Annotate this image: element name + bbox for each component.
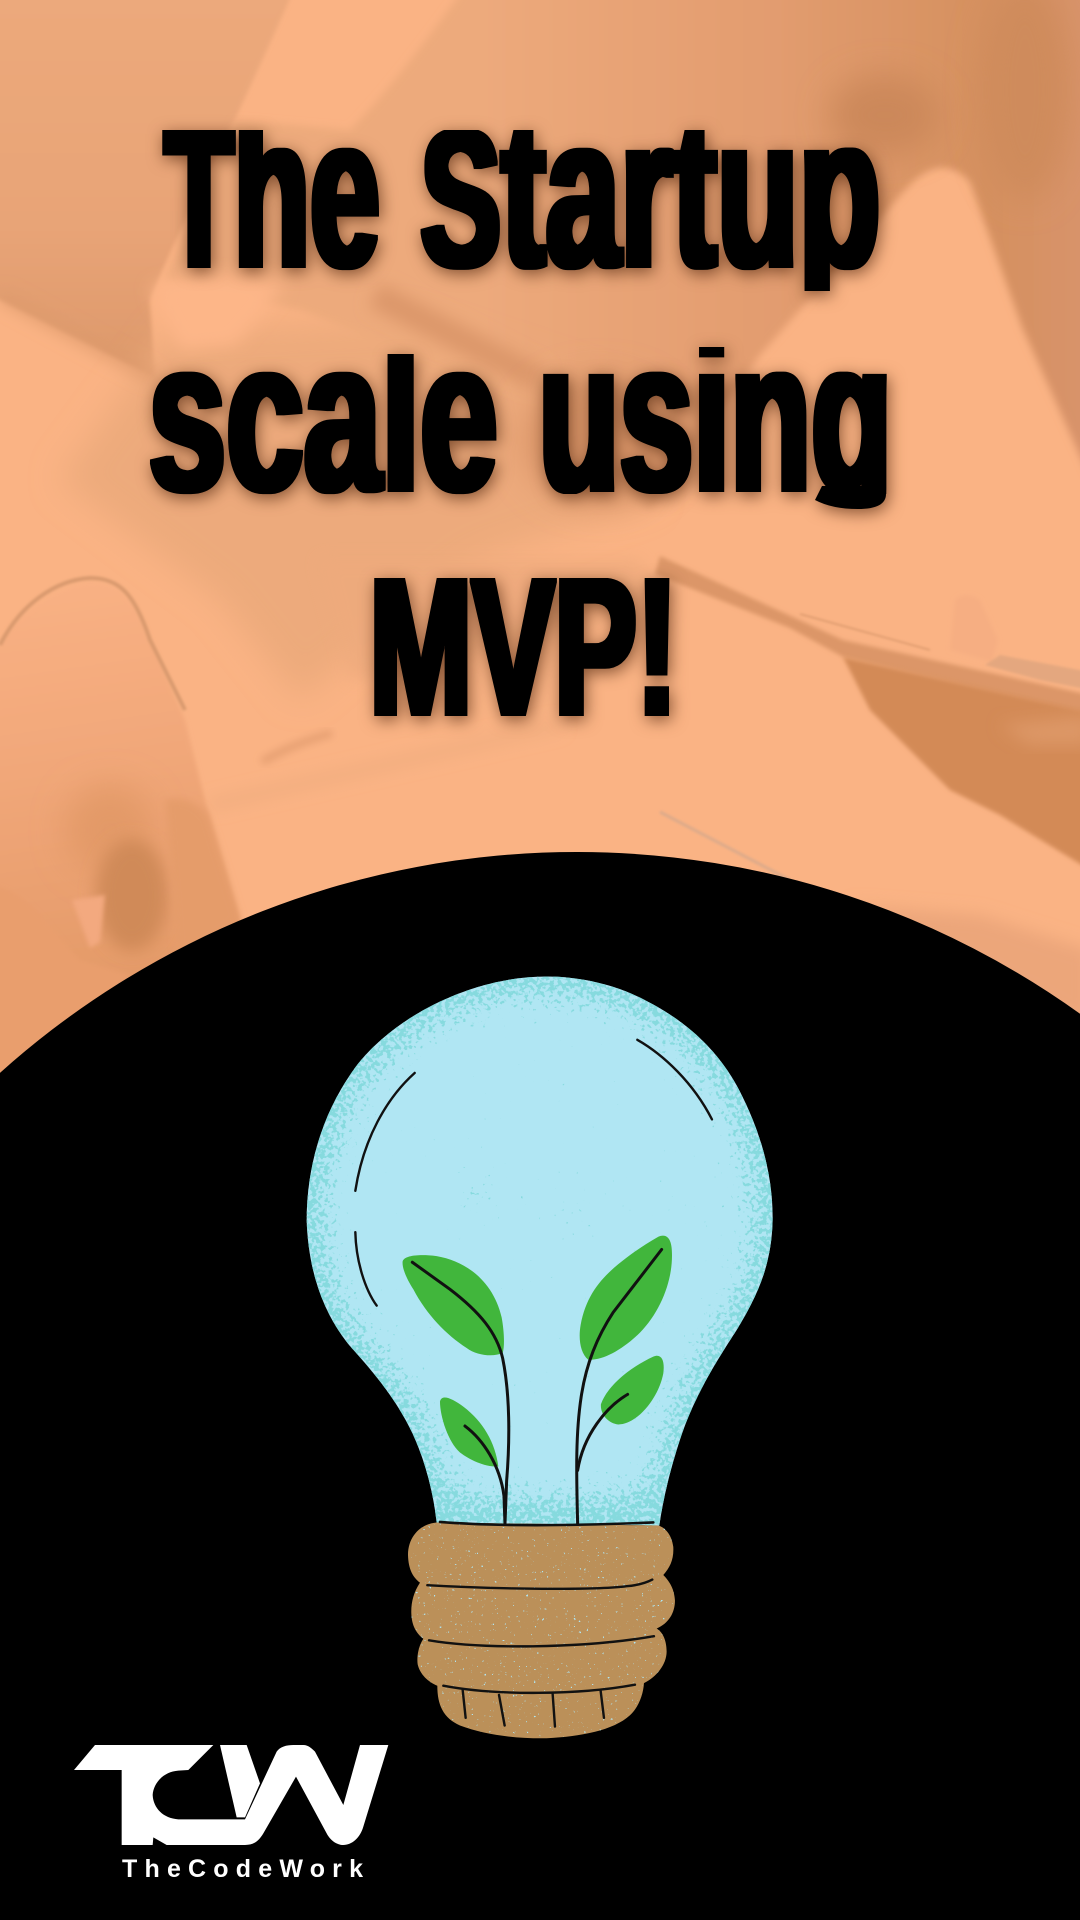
title: The [164,71,380,312]
title: using [538,295,892,536]
bulb glass [306,976,773,1526]
stems, veins and highlight lines [355,1040,712,1727]
left hand [0,582,245,1100]
black arc panel [0,852,1080,1920]
logo mark [74,1745,388,1845]
title [148,71,892,756]
logo wordmark: TheCodeWork [122,1855,363,1883]
photo background: blurred peach desk scene [0,0,1080,1100]
title: MVP! [370,537,678,756]
leaves [403,1236,672,1467]
icon: light bulb with sprouting plant [306,976,773,1738]
title: scale [148,294,498,536]
phone and right hand [655,556,1080,715]
screw base [408,1522,675,1738]
logo: TheCodeWork [74,1745,388,1883]
title: Startup [420,71,880,313]
